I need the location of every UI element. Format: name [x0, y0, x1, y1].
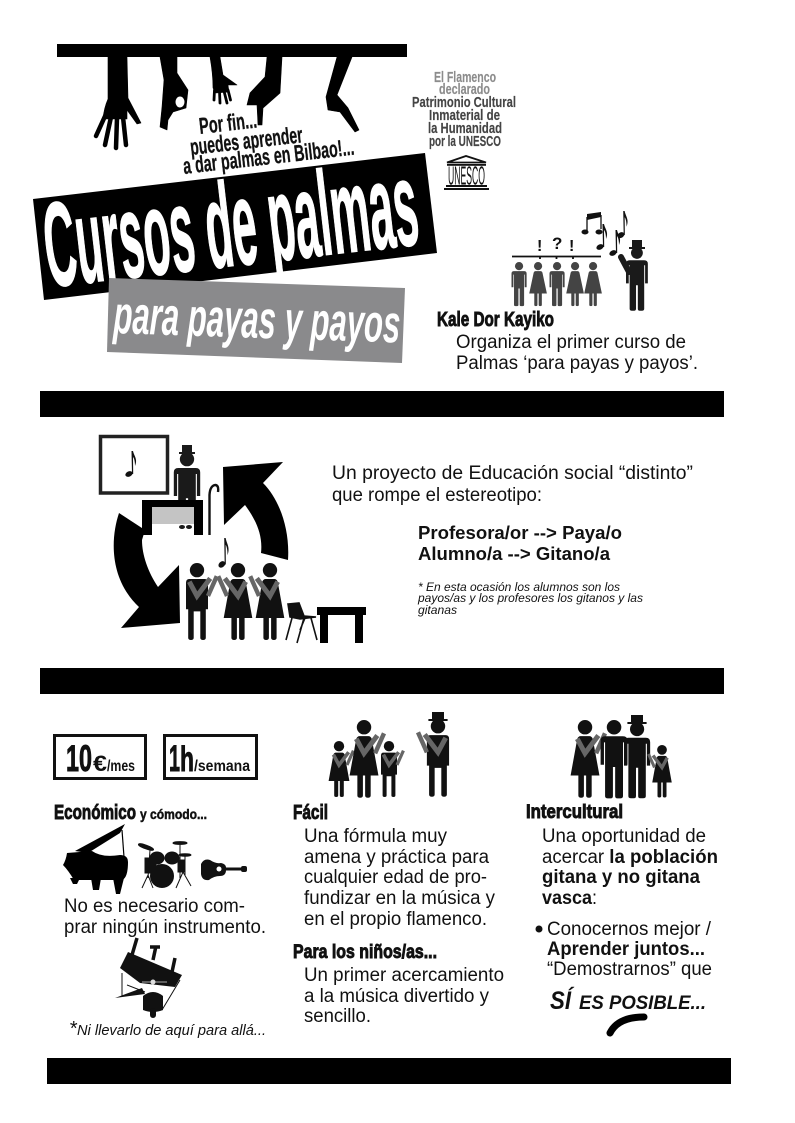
icon: grand piano — [63, 824, 128, 894]
music notes — [582, 211, 628, 257]
icon: conductor and five learners — [512, 211, 648, 311]
heading: children: Para los niños/as... — [293, 942, 437, 963]
icon: small hand — [210, 57, 237, 103]
icon: intercultural family — [571, 715, 672, 798]
icon: OK hand — [160, 57, 188, 130]
text: children: Un primer acercamiento — [304, 965, 504, 986]
text: organiser: Organiza el primer curso de — [456, 332, 686, 353]
icon: UNESCO temple — [444, 156, 489, 190]
icon: smile arc — [610, 1017, 644, 1033]
price box — [54, 736, 146, 779]
text: bullet: “Demostrarnos” que — [547, 959, 712, 980]
text: opportunity: Una oportunidad de — [542, 826, 706, 847]
text: opportunity: gitana y no gitana — [542, 867, 700, 888]
icon: pointing hand — [247, 57, 282, 125]
text: UNESCO — [448, 160, 485, 190]
text: organiser: Palmas ‘para payas y payos’. — [456, 353, 698, 374]
heading: Intercultural: Intercultural — [526, 802, 623, 823]
subtitle banner: para payas y payos — [111, 285, 401, 355]
price box: /mes — [107, 758, 135, 775]
icon: piano on scooter — [115, 938, 182, 1018]
subtitle banner — [107, 278, 405, 363]
icon: teacher at podium — [142, 445, 203, 535]
text: no instrument — [64, 896, 266, 938]
learners — [512, 262, 602, 306]
text: project description: Un proyecto de Educación social “distinto” — [332, 463, 693, 484]
text: sí es posible: SÍ — [550, 986, 575, 1015]
text: bullet — [536, 919, 712, 980]
text: project description — [332, 463, 693, 506]
text: children: sencillo. — [304, 1006, 371, 1027]
tagline: a dar palmas en Bilbao!... — [182, 134, 355, 179]
icon: chair — [286, 603, 317, 643]
icon: guitar — [201, 860, 247, 880]
text: role swap — [418, 523, 622, 564]
text: scooter note: Ni llevarlo de aquí para allá... — [77, 1022, 266, 1039]
heading: Económico: y cómodo... — [140, 806, 207, 822]
text: sí es posible — [550, 986, 706, 1015]
UNESCO text: declarado — [439, 82, 490, 98]
icon: drooping hand — [326, 57, 359, 132]
icon: clapping family — [329, 712, 449, 798]
arrow: curved down-left — [114, 513, 180, 628]
title banner — [33, 137, 437, 313]
icon: drum kit — [138, 842, 191, 888]
text: easy: en el propio flamenco. — [304, 909, 487, 930]
heading: Fácil: Fácil — [293, 802, 328, 824]
text: footnote: gitanas — [418, 605, 457, 617]
bracket and reactions — [512, 234, 601, 259]
text: bullet: Aprender juntos... — [547, 939, 705, 960]
time box: /semana — [194, 758, 250, 775]
text: scooter note: * — [69, 1018, 78, 1040]
time box — [164, 736, 256, 779]
text: organiser — [456, 332, 698, 374]
text: role swap: Profesora/or --> Paya/o — [418, 523, 622, 543]
UNESCO text: Inmaterial de — [429, 108, 500, 124]
text: footnote: * En esta ocasión los alumnos son los — [418, 582, 620, 594]
tagline — [182, 107, 355, 179]
UNESCO text: por la UNESCO — [429, 134, 501, 150]
heading: Kale Dor Kayiko: Kale Dor Kayiko — [437, 309, 554, 331]
UNESCO text: Patrimonio Cultural — [412, 95, 516, 111]
conductor — [621, 240, 648, 311]
tagline: puedes aprender — [189, 121, 304, 160]
UNESCO text: la Humanidad — [428, 121, 502, 137]
text: project description: que rompe el estereotipo: — [332, 485, 542, 506]
top bar — [57, 44, 407, 57]
section bar 2 — [40, 668, 724, 694]
text: no instrument: No es necesario com- — [64, 896, 245, 917]
text: footnote: payos/as y los profesores los gitanos y las — [417, 593, 643, 605]
text: footnote — [417, 582, 643, 617]
text: no instrument: prar ningún instrumento. — [64, 917, 266, 938]
text: opportunity: acercar la población — [542, 847, 718, 868]
footer bar — [47, 1058, 731, 1084]
time box: 1 — [169, 738, 180, 779]
time box: h — [180, 740, 194, 779]
icon: three clapping singers — [186, 563, 284, 640]
icon: open hand — [96, 57, 141, 148]
bracket and reactions: ! — [537, 238, 542, 255]
UNESCO text: El Flamenco — [434, 70, 496, 86]
section bar 1 — [40, 391, 724, 417]
text: easy: amena y práctica para — [304, 847, 489, 868]
price box: 10 — [66, 738, 92, 779]
text: easy: fundizar en la música y — [304, 888, 495, 909]
text: opportunity: vasca: — [542, 888, 597, 909]
icon: reaching hands — [96, 57, 359, 148]
heading: Económico: Económico — [54, 802, 136, 824]
text: easy — [304, 826, 495, 930]
bracket and reactions: ? — [552, 234, 562, 253]
UNESCO text — [412, 70, 516, 150]
arrow: curved up-right — [223, 462, 288, 560]
icon: screen with note — [100, 436, 168, 493]
text: sí es posible: ES POSIBLE... — [579, 993, 706, 1014]
tagline: Por fin... — [198, 107, 258, 139]
text: bullet: Conocernos mejor / — [547, 919, 712, 940]
price box: € — [93, 751, 107, 776]
text: children: a la música divertido y — [304, 986, 489, 1007]
icon: table — [317, 607, 366, 643]
bracket and reactions: ! — [569, 238, 574, 255]
diagram: role reversal — [100, 436, 366, 643]
text: role swap: Alumno/a --> Gitano/a — [418, 544, 611, 564]
text: opportunity — [542, 826, 718, 909]
icon: note over singers — [218, 538, 229, 569]
text: easy: Una fórmula muy — [304, 826, 447, 847]
icon: cane — [210, 485, 218, 535]
text: children — [304, 965, 504, 1027]
text: easy: cualquier edad de pro- — [304, 867, 487, 888]
